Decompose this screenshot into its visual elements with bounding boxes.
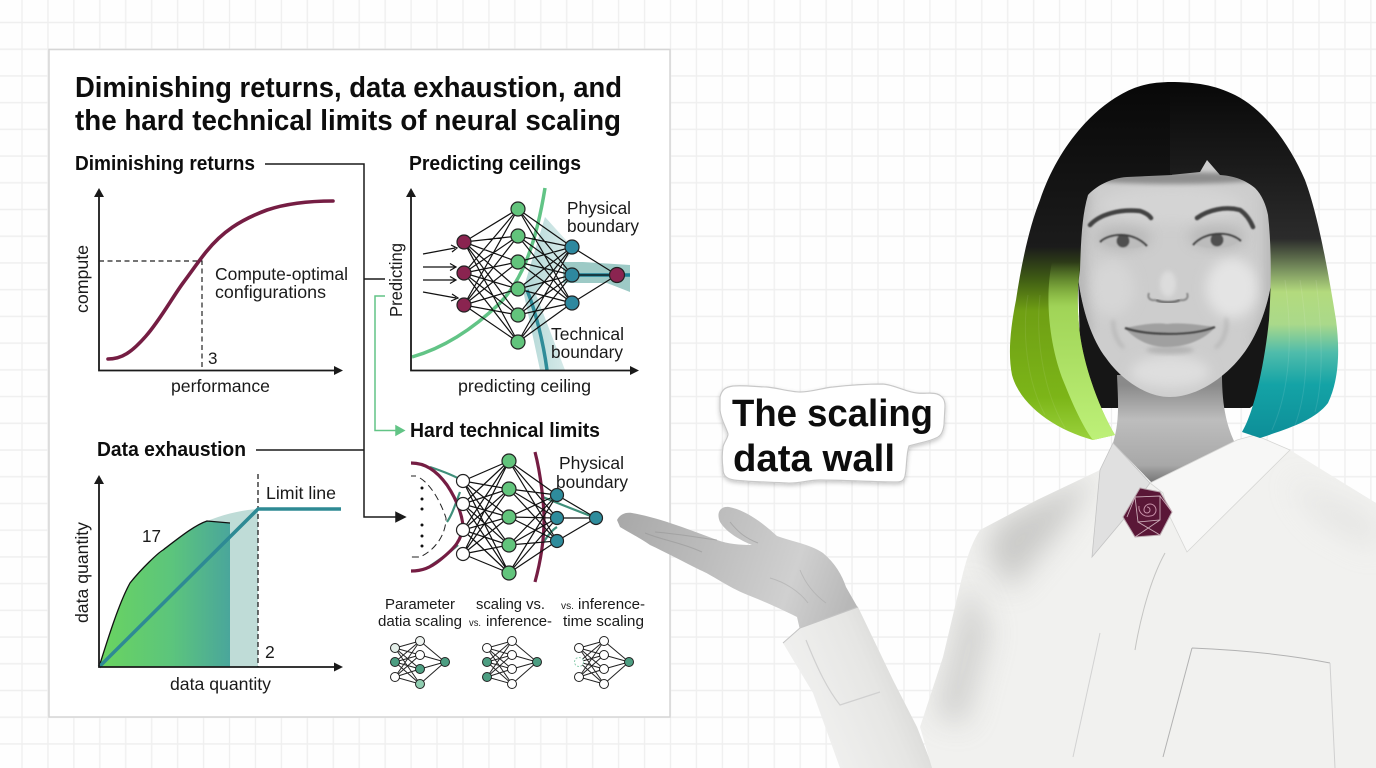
heading: diminishing returns: Diminishing returns — [75, 153, 255, 175]
callout: the scaling data wall — [720, 384, 945, 483]
chart: s-curve: performance — [171, 376, 270, 396]
collar — [1092, 435, 1290, 557]
panel: diminishing returns — [72, 153, 348, 396]
mini network: inference-time scaling — [574, 636, 634, 688]
mini label columns: datia scaling — [378, 613, 462, 630]
chart: data wall — [72, 474, 343, 694]
chart: data wall: data quantity — [170, 674, 271, 694]
panel: infographic card — [49, 50, 670, 717]
mini network: parameter data scaling — [390, 636, 450, 688]
title: the hard technical limits of neural scaling — [75, 105, 621, 137]
mini label columns: time scaling — [563, 613, 644, 630]
face — [1078, 160, 1271, 397]
diagram: limits network — [411, 452, 628, 582]
mini label columns — [378, 596, 645, 630]
heading: data exhaustion: Data exhaustion — [97, 439, 246, 461]
mini label columns: Parameter — [385, 596, 455, 613]
chart: data wall: Limit line — [266, 483, 336, 503]
mini label columns: vs. — [561, 601, 574, 612]
chart: network with boundaries: Physical — [567, 198, 631, 218]
face: nose — [1148, 271, 1188, 302]
rose brooch — [1123, 488, 1172, 537]
callout: the scaling data wall: The scaling — [732, 393, 933, 435]
chart: network with boundaries: Predicting — [386, 243, 406, 317]
diagram: limits network: Physical — [559, 453, 624, 473]
neck — [1113, 375, 1237, 484]
title: Diminishing returns, data exhaustion, and — [75, 72, 622, 104]
panel: hard technical limits — [378, 420, 645, 688]
mini label columns: vs. — [469, 618, 481, 629]
chart: network with boundaries — [386, 188, 639, 396]
callout: the scaling data wall: data wall — [733, 438, 895, 480]
chart: s-curve — [72, 188, 348, 396]
chart: network with boundaries: boundary — [551, 342, 623, 362]
chart: data wall: 2 — [265, 642, 275, 662]
mini network: scaling vs inference — [482, 636, 542, 688]
mini label columns: scaling vs. — [476, 596, 545, 613]
arm: hand — [617, 507, 858, 630]
chart: s-curve: compute — [72, 245, 92, 313]
diagram: limits network: boundary — [556, 472, 628, 492]
face: eyebrows — [1090, 208, 1253, 227]
chart: s-curve: 3 — [208, 349, 217, 368]
chart: network with boundaries: Technical — [551, 324, 624, 344]
hair: right side — [1170, 82, 1338, 438]
heading: predicting ceilings: Predicting ceilings — [409, 153, 581, 175]
presenter figure — [617, 82, 1376, 768]
heading: hard technical limits: Hard technical limits — [410, 420, 600, 442]
chart: network with boundaries: predicting ceiling — [458, 376, 591, 396]
mini label columns: inference- — [486, 613, 552, 630]
chart: data wall: 17 — [142, 526, 161, 546]
chart: data wall: data quantity — [72, 522, 92, 623]
face: mouth — [1113, 318, 1226, 348]
back hair — [1078, 270, 1272, 408]
panel: predicting ceilings — [386, 153, 639, 396]
mini label columns: inference- — [578, 596, 645, 613]
chart: s-curve: Compute-optimal — [215, 264, 348, 284]
chart: s-curve: configurations — [215, 282, 326, 302]
face: eyes — [1100, 234, 1241, 248]
panel: data exhaustion — [72, 439, 343, 694]
arm: shirt sleeve — [783, 607, 933, 768]
title — [75, 72, 622, 137]
connector lines — [256, 164, 405, 522]
hair: left side — [1010, 82, 1172, 440]
chart: network with boundaries: boundary — [567, 216, 639, 236]
shirt body — [920, 447, 1376, 768]
